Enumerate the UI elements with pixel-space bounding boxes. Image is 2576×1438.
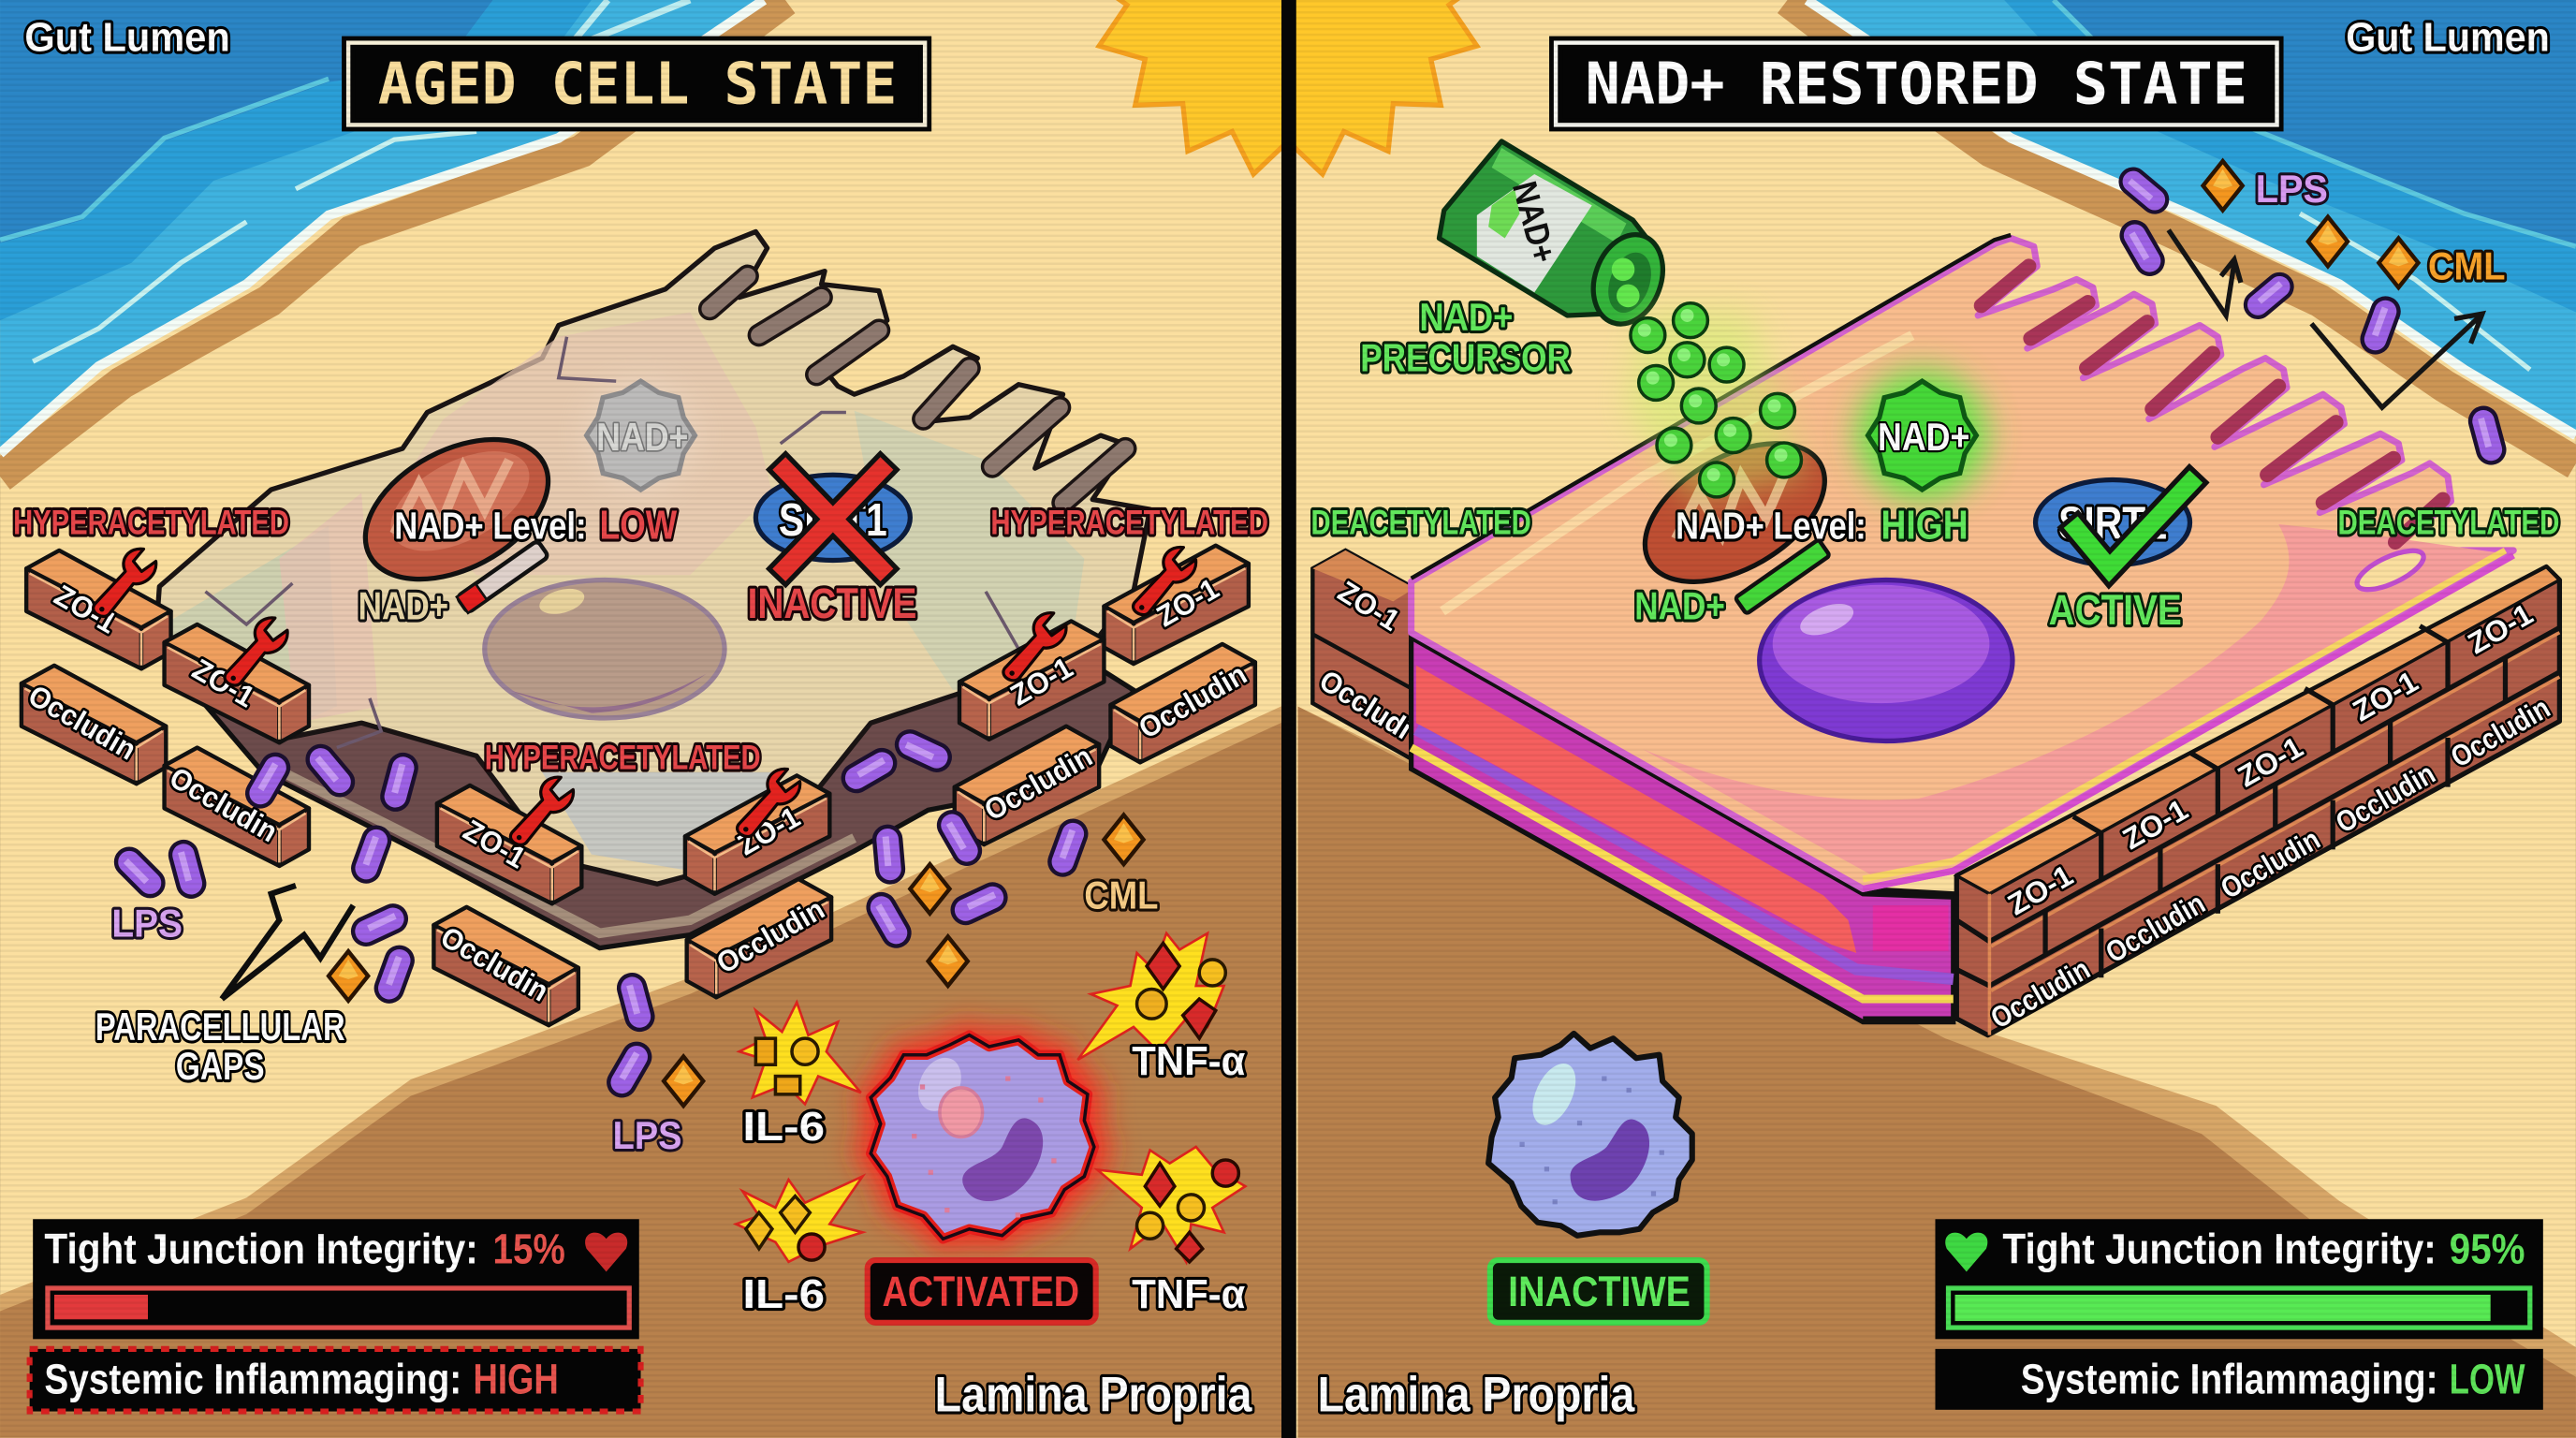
- brick: Occludin left 1: [22, 666, 166, 784]
- paracellular gaps label: [95, 1005, 345, 1088]
- inactive badge: INACTIWE: [1508, 1268, 1690, 1315]
- brick: Occludin right 3: [687, 879, 831, 997]
- cytokine labels: [742, 1038, 1245, 1317]
- sun: [1088, 0, 1488, 174]
- right brick wall: [1956, 566, 2559, 1035]
- aged cell: damaged base rim: [276, 769, 855, 933]
- wall brick labels: Occludin: [2100, 886, 2211, 969]
- paracellular gaps label: PARACELLULAR: [95, 1005, 345, 1049]
- paracellular gaps label: GAPS: [176, 1044, 265, 1088]
- brick: Occludin left 3: Occludin: [435, 919, 554, 1008]
- active label: ACTIVE: [2049, 586, 2182, 634]
- HUD: tight junction integrity 15%: 15%: [493, 1225, 565, 1273]
- left brick wall: Occludi: [1313, 663, 1418, 745]
- brick: ZO-1 left 2: ZO-1: [187, 652, 260, 713]
- brick: Occludin right 2: [955, 726, 1099, 844]
- low NAD+ molecule: [585, 379, 696, 492]
- arrow: paracellular gap zigzag: [222, 886, 353, 999]
- cytokine labels: IL-6: [742, 1271, 825, 1317]
- hyperacetylated labels: HYPERACETYLATED: [13, 503, 289, 541]
- right sea: gut lumen: [1788, 0, 2576, 463]
- restored cell: surface highlight: [1442, 335, 1912, 611]
- arrows: barrier bounce: [2169, 230, 2482, 407]
- cytokine burst: IL-6 bottom: [736, 1177, 862, 1262]
- low NAD+ molecule: NAD+: [596, 415, 688, 459]
- brick: Occludin left 2: Occludin: [164, 760, 284, 848]
- wall brick labels: Occludin: [2215, 822, 2325, 905]
- blocked CML diamonds: [2203, 161, 2418, 287]
- active SIRT1: [2036, 479, 2190, 568]
- brick: ZO-1 right 1: ZO-1: [1150, 571, 1224, 633]
- brick: Occludin left 2: [164, 748, 309, 866]
- blocked LPS particles: [2115, 164, 2507, 466]
- deacetylated labels: DEACETYLATED: [1311, 503, 1531, 541]
- brick: ZO-1 right 3: ZO-1: [732, 800, 806, 861]
- wall brick labels: ZO-1: [2232, 730, 2308, 794]
- brick: Occludin right 1: Occludin: [1133, 656, 1252, 745]
- activated macrophage: [855, 1022, 1110, 1252]
- CML diamonds: [329, 814, 1144, 1106]
- restored cell side face: [1412, 633, 1954, 1022]
- NAD+ precursor label: NAD+: [1419, 295, 1513, 339]
- title: aged cell state: [342, 37, 931, 131]
- NAD+ precursor bottle: [1439, 141, 1675, 334]
- wall brick labels: [1984, 596, 2555, 1035]
- cytokine labels: TNF-α: [1132, 1038, 1245, 1084]
- NAD+ precursor pellets: [1627, 303, 1808, 501]
- deacetylated labels: [1311, 503, 2559, 541]
- inactive macrophage: [1488, 1034, 1692, 1236]
- inactive badge: [1490, 1260, 1707, 1323]
- brick: Occludin left 1: Occludin: [22, 678, 142, 767]
- icon: red heart: [585, 1233, 627, 1271]
- LPS labels: LPS: [613, 1113, 681, 1157]
- CML label: CML: [1084, 873, 1158, 917]
- brick: ZO-1 right 3: [685, 775, 829, 894]
- left brick wall: ZO-1: [1332, 574, 1406, 638]
- wall brick labels: Occludin: [1984, 951, 2096, 1035]
- aged cell: ragged top surface with microvilli: [156, 231, 1150, 884]
- blocked LPS label: LPS: [2256, 167, 2328, 211]
- wall brick labels: ZO-1: [2462, 596, 2539, 660]
- left sea: gut lumen: [0, 0, 785, 477]
- HUD: systemic inflammaging low: Systemic Inflammaging:: [2021, 1355, 2438, 1402]
- brick: ZO-1 left 3: [437, 785, 581, 903]
- inactive label: INACTIVE: [748, 580, 916, 627]
- HUD: systemic inflammaging low: LOW: [2450, 1355, 2525, 1402]
- restored NAD+ molecule: NAD+: [1878, 415, 1969, 459]
- LPS labels: LPS: [111, 901, 183, 945]
- lamina propria label left: Lamina Propria: [935, 1368, 1252, 1423]
- brick: ZO-1 right 2: ZO-1: [1004, 650, 1078, 712]
- HUD: systemic inflammaging low: [1935, 1349, 2543, 1410]
- activated badge: [868, 1260, 1096, 1323]
- cytokine burst: IL-6 top: [739, 1003, 861, 1104]
- HUD: tight junction integrity 95%: Tight Junction Integrity:: [2002, 1225, 2437, 1273]
- blocked CML label: CML: [2428, 243, 2505, 287]
- hyperacetylated labels: [13, 503, 1268, 776]
- HUD: tight junction integrity 15%: [33, 1219, 639, 1339]
- hyperacetylated labels: HYPERACETYLATED: [485, 738, 761, 776]
- gut lumen label right: Gut Lumen: [2346, 14, 2550, 60]
- HUD: systemic inflammaging high: Systemic Inflammaging:: [44, 1355, 461, 1402]
- brick: ZO-1 left 2: [165, 624, 309, 742]
- restored cell top surface with microvilli: [1412, 238, 2513, 888]
- NAD+ gauge high: [1634, 539, 1830, 628]
- icon: green heart: [1945, 1233, 1987, 1271]
- NAD+ gauge high: NAD+: [1634, 584, 1725, 628]
- left panel: lamina propria ground: [0, 703, 1288, 1438]
- wall brick labels: Occludin: [2330, 756, 2440, 840]
- NAD+ level label: NAD+ Level:: [1676, 505, 1866, 548]
- brick: ZO-1 left 1: [26, 550, 171, 668]
- wall brick labels: ZO-1: [2117, 792, 2193, 856]
- aged nucleus: [485, 580, 724, 718]
- title: aged cell state: AGED CELL STATE: [378, 51, 897, 118]
- title: NAD+ restored state: NAD+ RESTORED STATE: [1586, 51, 2247, 118]
- brick: ZO-1 left 1: ZO-1: [49, 578, 123, 640]
- restored NAD+ molecule: [1856, 370, 1988, 501]
- restored cell: rim near bricks: [1863, 550, 2513, 888]
- HUD: tight junction integrity 95%: [1935, 1219, 2543, 1339]
- NAD+ gauge low: NAD+: [359, 584, 448, 628]
- NAD+ precursor label: [1360, 295, 1571, 380]
- panel: NAD+ restored state: [1311, 14, 2559, 1423]
- NAD+ gauge low: [359, 540, 549, 628]
- brick: Occludin left 3: [433, 907, 578, 1025]
- inactive SIRT1: [755, 470, 910, 568]
- HUD: systemic inflammaging high: HIGH: [474, 1355, 559, 1402]
- HUD: systemic inflammaging high: [30, 1349, 641, 1412]
- wall brick labels: ZO-1: [2347, 664, 2423, 727]
- healthy mitochondrion: [1621, 415, 1848, 610]
- aged cell: pale colour patches: [165, 312, 1084, 871]
- aged mitochondrion: [342, 411, 572, 608]
- wrench icons: [94, 547, 1196, 844]
- brick: Occludin right 3: Occludin: [710, 891, 830, 980]
- NAD+ level label: LOW: [600, 503, 678, 549]
- NAD+ level label: NAD+ Level:: [394, 505, 587, 548]
- brick: Occludin right 2: Occludin: [978, 739, 1098, 828]
- wall brick labels: ZO-1: [2002, 858, 2078, 921]
- left brick wall: [1312, 550, 1418, 761]
- panel: aged cell state: [13, 14, 1268, 1423]
- gut lumen label left: Gut Lumen: [24, 14, 230, 60]
- restored cell: pink inner band: [1643, 524, 2505, 875]
- microvillus opening behind label: [2352, 543, 2429, 597]
- inactive SIRT1: SIRT1: [779, 495, 887, 546]
- divider between panels: [1281, 0, 1296, 1438]
- lamina propria label right: Lamina Propria: [1318, 1368, 1635, 1423]
- LPS particles leaking: [110, 727, 1090, 1100]
- NAD+ level label: HIGH: [1881, 503, 1969, 549]
- aged cell: microvilli shadows: [710, 276, 1125, 503]
- brick: ZO-1 right 1: [1104, 546, 1249, 664]
- brick: ZO-1 left 3: ZO-1: [458, 813, 532, 874]
- NAD+ precursor bottle: NAD+: [1505, 178, 1563, 267]
- aged cell: exposed damaged base: [165, 493, 1134, 948]
- microvilli slots: [1982, 266, 2443, 542]
- cytokine labels: IL-6: [742, 1104, 825, 1150]
- wall brick labels: Occludin: [2445, 690, 2555, 774]
- LPS labels: [111, 901, 681, 1157]
- right panel: lamina propria ground: [1298, 707, 2576, 1438]
- brick: ZO-1 right 2: [959, 621, 1104, 740]
- active SIRT1: SIRT1: [2058, 499, 2167, 550]
- restored cell: upper edge outline: [1412, 235, 2011, 579]
- healthy nucleus: [1760, 580, 2012, 741]
- HUD: tight junction integrity 95%: 95%: [2450, 1225, 2525, 1273]
- cytokine burst: TNF-alpha bottom: [1097, 1147, 1245, 1262]
- hyperacetylated labels: HYPERACETYLATED: [990, 503, 1268, 541]
- title: NAD+ restored state: [1549, 37, 2284, 131]
- cytokine burst: TNF-alpha top: [1077, 933, 1225, 1060]
- cytokine labels: TNF-α: [1132, 1271, 1245, 1317]
- HUD: tight junction integrity 15%: Tight Junction Integrity:: [44, 1225, 478, 1273]
- activated badge: ACTIVATED: [883, 1268, 1079, 1315]
- brick: Occludin right 1: [1110, 644, 1255, 762]
- NAD+ precursor label: PRECURSOR: [1360, 336, 1571, 380]
